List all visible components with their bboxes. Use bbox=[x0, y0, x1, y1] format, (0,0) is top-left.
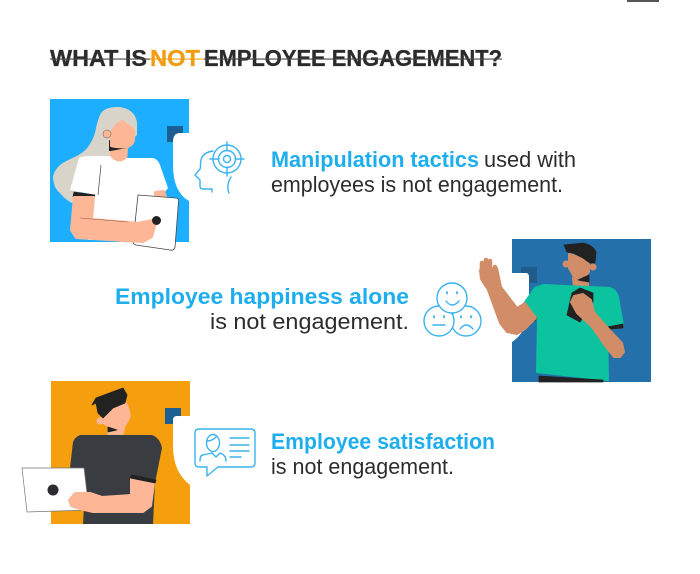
text: employee satisfaction: is not engagement. bbox=[271, 454, 454, 479]
text: manipulation tactics: Manipulation tactics bbox=[271, 147, 479, 172]
text: manipulation tactics: employees is not engagement. bbox=[271, 172, 563, 197]
woman figure bbox=[53, 107, 168, 242]
title: WHAT IS bbox=[50, 45, 147, 71]
text: employee satisfaction: Employee satisfaction bbox=[271, 429, 495, 454]
text: manipulation tactics bbox=[271, 147, 576, 197]
icon: three faces bbox=[424, 283, 481, 336]
tablet bbox=[120, 195, 179, 250]
text: employee happiness bbox=[115, 284, 409, 334]
text: employee happiness: Employee happiness alone bbox=[115, 284, 409, 309]
panel: employee satisfaction illustration bbox=[22, 381, 190, 524]
title bbox=[50, 45, 502, 71]
icon: profile card with speech tail bbox=[195, 429, 255, 476]
title: NOT bbox=[150, 45, 200, 71]
text: manipulation tactics: used with bbox=[484, 147, 576, 172]
icon: head with target bbox=[195, 142, 244, 193]
panel: employee happiness illustration bbox=[480, 239, 651, 382]
text: employee satisfaction bbox=[271, 429, 495, 479]
text: employee happiness: is not engagement. bbox=[210, 309, 409, 334]
title: EMPLOYEE ENGAGEMENT? bbox=[204, 45, 502, 71]
panel: manipulation tactics illustration bbox=[50, 99, 189, 250]
man with laptop bbox=[70, 388, 162, 524]
man with phone bbox=[480, 243, 624, 382]
laptop bbox=[22, 468, 156, 512]
